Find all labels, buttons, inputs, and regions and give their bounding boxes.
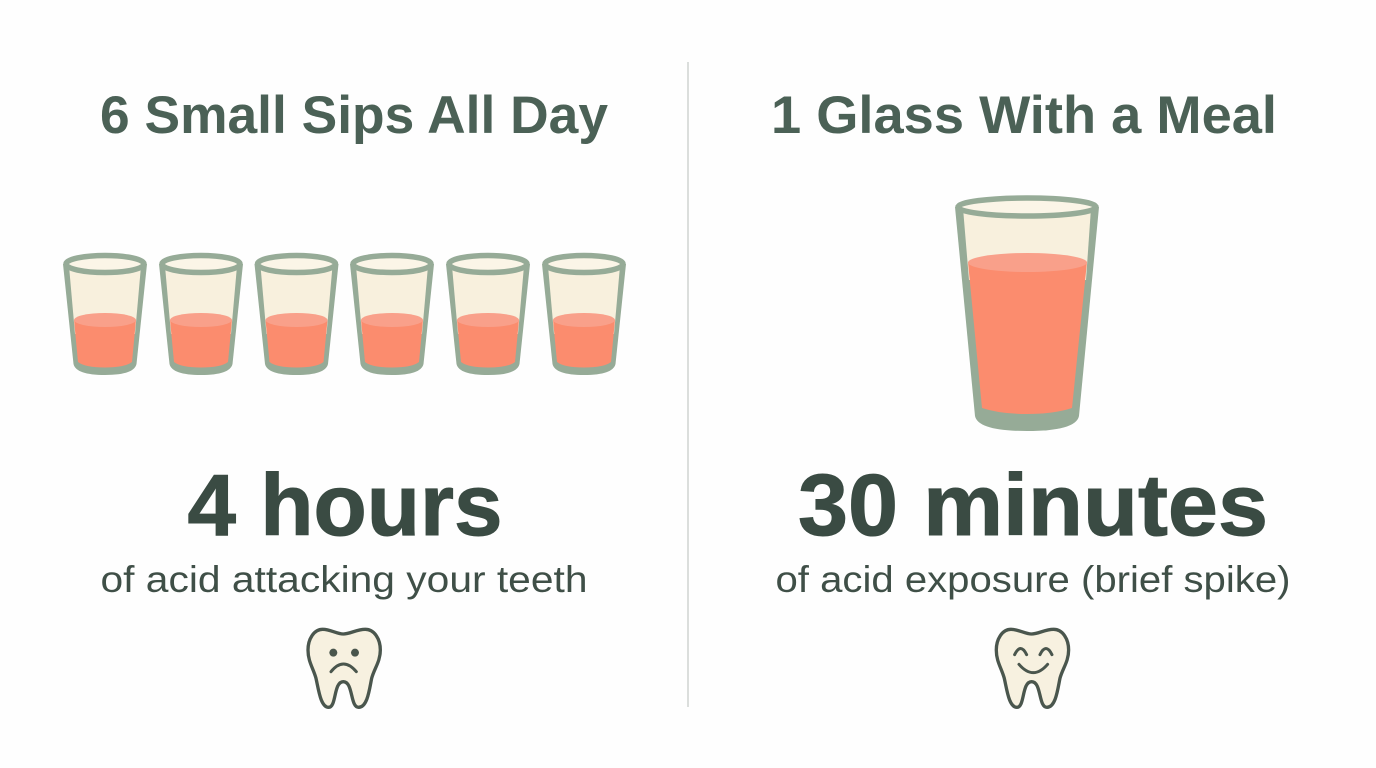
divider (687, 62, 689, 707)
icon: large glass (955, 198, 1099, 431)
heading: 6 small sips: 6 Small Sips All Day (100, 86, 609, 145)
stat: 4 hours: 4 hours (188, 457, 502, 554)
stat: 30 minutes: 30 minutes (798, 457, 1268, 554)
panel: one glass with a meal (771, 86, 1290, 707)
caption: acid exposure: of acid exposure (brief spike) (776, 559, 1290, 600)
icon: happy tooth (996, 629, 1069, 707)
icons: six small glasses (63, 256, 626, 375)
heading: 1 glass: 1 Glass With a Meal (771, 86, 1277, 145)
caption: acid attacking: of acid attacking your teeth (100, 559, 588, 600)
panel: six small sips (63, 86, 626, 707)
icon: sad tooth (308, 629, 380, 707)
